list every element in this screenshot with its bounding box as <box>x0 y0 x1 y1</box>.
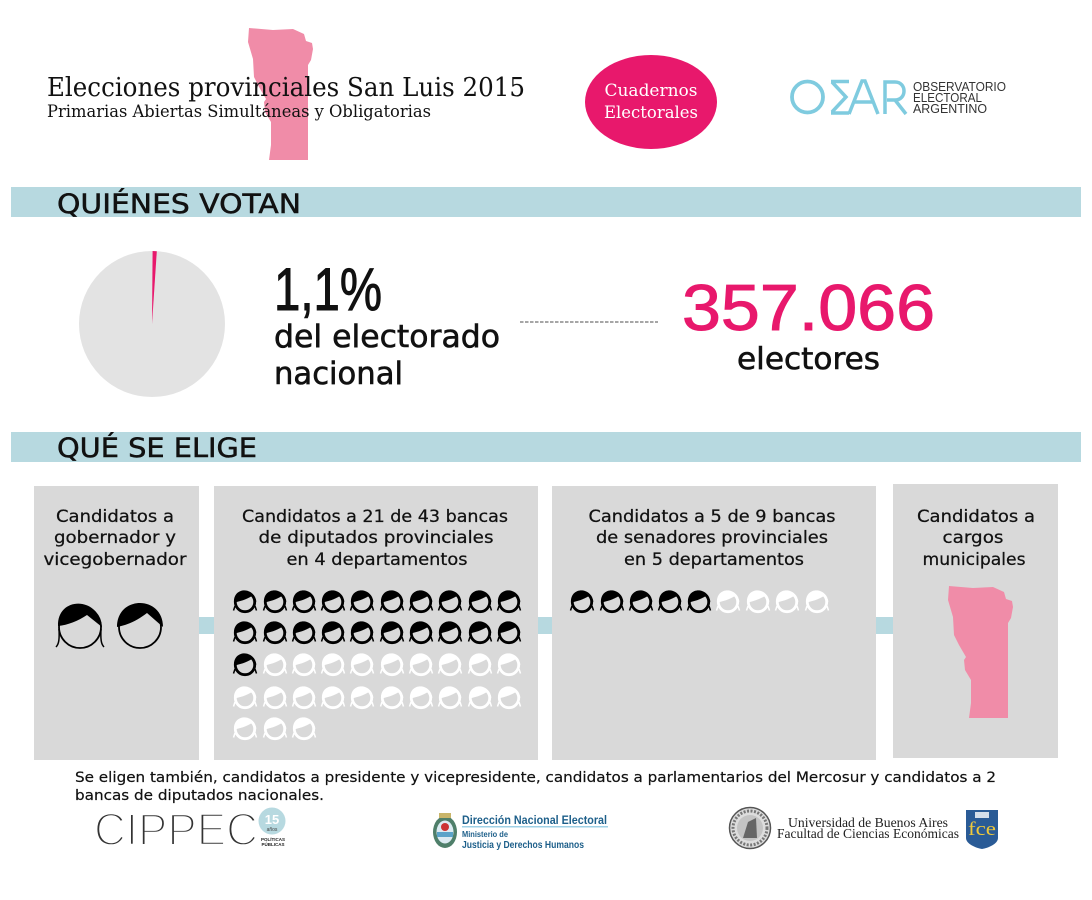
logo: OEAR: ELECTORAL <box>913 91 982 105</box>
panel: gobernador: vicegobernador <box>44 550 186 570</box>
panel: municipales: municipales <box>922 550 1026 570</box>
panel: senadores: en 5 departamentos <box>624 550 804 570</box>
icon grid: 21 black heads of 43 <box>234 590 520 739</box>
pie chart: 1,1% share <box>79 251 225 397</box>
logo: OEAR <box>792 80 1006 116</box>
stat: 357.066 electores: 357.066 <box>682 271 935 344</box>
panel: senadores: Candidatos a 5 de 9 bancas <box>588 507 836 527</box>
icon: San Luis map <box>948 586 1013 718</box>
panel: diputados <box>214 486 538 760</box>
panel: senadores <box>552 486 876 760</box>
dashed connector <box>520 321 658 323</box>
logo: CIPPEC: PÚBLICAS <box>261 841 285 847</box>
logo: Universidad de Buenos Aires FCE <box>730 808 998 849</box>
panel: diputados: de diputados provinciales <box>258 528 494 548</box>
panel: municipales: cargos <box>942 528 1004 548</box>
stat: 357.066 electores <box>682 271 935 377</box>
stat: 1,1% del electorado nacional: del electorado <box>274 319 500 355</box>
logo: OEAR: OBSERVATORIO <box>913 80 1006 94</box>
icon: San Luis map header <box>248 28 313 160</box>
section band: Qué se elige <box>11 432 1081 464</box>
panel: municipales <box>893 484 1058 758</box>
footnote: Se eligen también, candidatos a presidente y vicepresidente, candidatos a parlamentarios del Mercosur y candidatos a 2 <box>75 770 996 786</box>
icon grid: 5 black heads of 9 <box>570 590 828 612</box>
logo: Dirección Nacional Electoral: Justicia y Derechos Humanos <box>462 840 584 851</box>
panel: senadores: de senadores provinciales <box>596 528 828 548</box>
subtitle: Primarias Abiertas Simultáneas y Obligatorias <box>47 102 431 121</box>
section band: Quiénes votan: QUIÉNES VOTAN <box>57 188 301 220</box>
icon: woman and man heads <box>56 603 163 648</box>
section band: Qué se elige: QUÉ SE ELIGE <box>57 432 257 464</box>
stat: 1,1% del electorado nacional: 1,1% <box>274 256 382 323</box>
stat: 1,1% del electorado nacional <box>274 256 500 392</box>
logo: Dirección Nacional Electoral <box>433 813 608 851</box>
section band: Quiénes votan <box>11 187 1081 220</box>
logo: Universidad de Buenos Aires FCE: Facultad de Ciencias Económicas <box>777 826 959 841</box>
logo: CIPPEC: POLÍTICAS <box>261 835 285 842</box>
panel: gobernador <box>34 486 199 760</box>
badge: Cuadernos Electorales: Electorales <box>604 103 698 123</box>
panel: diputados: Candidatos a 21 de 43 bancas <box>242 507 508 527</box>
badge: Cuadernos Electorales: Cuadernos <box>604 81 698 101</box>
panel: municipales: Candidatos a <box>917 507 1035 527</box>
logo: Universidad de Buenos Aires FCE: Universidad de Buenos Aires <box>788 815 948 830</box>
logo: Dirección Nacional Electoral: Ministerio de <box>462 830 509 839</box>
logo: CIPPEC: 15 <box>265 812 279 827</box>
panel: gobernador: gobernador y <box>54 528 176 548</box>
panel: diputados: en 4 departamentos <box>286 550 468 570</box>
stat: 357.066 electores: electores <box>737 342 880 377</box>
connector strips between panels <box>199 617 893 634</box>
stat: 1,1% del electorado nacional: nacional <box>274 356 403 392</box>
logo: CIPPEC: años <box>267 827 278 833</box>
logo: Dirección Nacional Electoral: Dirección Nacional Electoral <box>462 815 607 827</box>
footnote <box>75 770 996 804</box>
footnote: bancas de diputados nacionales. <box>75 788 324 804</box>
logo: Universidad de Buenos Aires FCE: fce <box>968 819 996 840</box>
badge: Cuadernos Electorales <box>585 55 717 149</box>
logo: CIPPEC: CIPPEC <box>94 804 258 855</box>
title: Elecciones provinciales San Luis 2015 <box>47 73 525 103</box>
logo: OEAR: ARGENTINO <box>913 102 987 116</box>
panel: gobernador: Candidatos a <box>56 507 174 527</box>
